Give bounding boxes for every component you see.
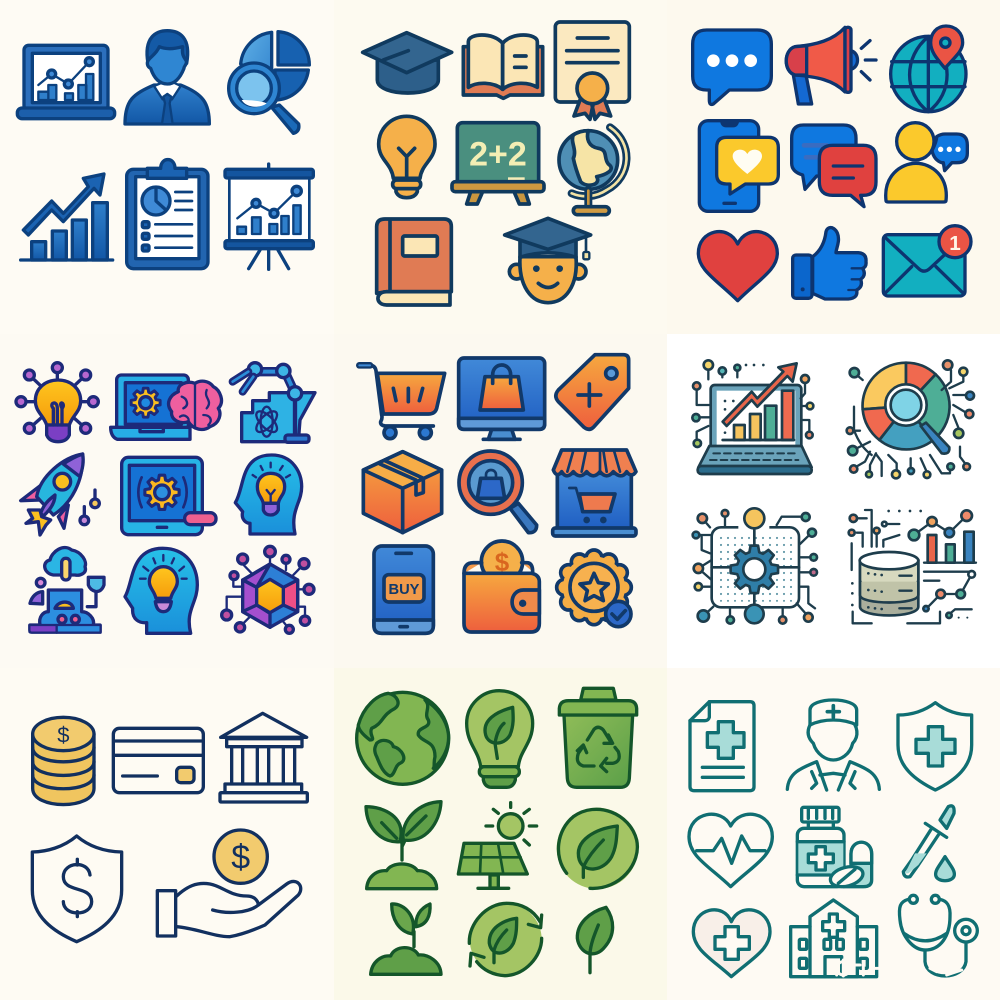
icon: recycle bin (559, 688, 637, 787)
icon: gear circuit board (693, 508, 817, 624)
icon: graduate (505, 218, 591, 303)
icon: hexagon network (222, 546, 314, 633)
panel: finance (32, 713, 307, 942)
icon: donut chart with magnifier (847, 360, 974, 478)
icon: hand with coin (157, 830, 301, 937)
icon: phone with buy button (374, 546, 433, 633)
panel: healthcare (689, 700, 977, 977)
icon: price tag (556, 355, 629, 429)
icon: credit card (113, 728, 203, 793)
icon: rocket (21, 454, 99, 535)
icon: hand with coin: $ (231, 838, 250, 876)
watermark smudge (837, 960, 962, 976)
icon: light bulb (379, 116, 435, 198)
icon: coin stack (33, 717, 94, 805)
icon: head with bulb (235, 455, 302, 534)
icon: head with bulb 2 (125, 548, 197, 633)
icon: stethoscope (899, 895, 977, 976)
icon: laptop with chart (17, 45, 115, 119)
icon: wallet with coin (464, 541, 539, 632)
icon: heart with pulse (689, 814, 772, 887)
icon: thumbs up (793, 228, 866, 299)
icon: open book (463, 35, 543, 98)
icon: shopping cart (359, 365, 445, 439)
icon: diploma (555, 22, 629, 119)
icon: database with charts (849, 510, 976, 623)
panel: innovation and AI (16, 363, 315, 633)
icon: medicine bottle and pills (797, 807, 872, 890)
panel: education (363, 22, 629, 305)
icon: phone with buy button: BUY (389, 582, 420, 598)
icon: small seedling (371, 904, 441, 974)
icon: envelope with badge (883, 226, 971, 296)
icon: single leaf (577, 907, 613, 973)
icon: sprout with two leaves (366, 802, 441, 889)
icon: person with message (886, 123, 967, 202)
panel: e-commerce (359, 355, 636, 633)
icon: eco bulb (467, 691, 533, 787)
icon: laptop with brain (111, 375, 221, 439)
icon: globe with pin (891, 26, 966, 112)
panel: social media (693, 26, 971, 301)
icon: phone with heart bubble (699, 121, 778, 211)
icon: monitor with bag (459, 358, 545, 439)
icon: tablet with gear (122, 457, 216, 535)
panel: environment (357, 688, 638, 976)
icon: bank building (220, 713, 307, 802)
icon: earth (357, 692, 449, 784)
icon: globe (559, 127, 627, 215)
icon: growth chart with arrow (21, 174, 113, 260)
icon: medical document (690, 702, 754, 791)
icon: clipboard report (127, 160, 208, 269)
icon: two chat bubbles (792, 125, 876, 207)
icon: medical shield (898, 703, 972, 790)
icon: quality badge (557, 550, 631, 627)
icon: chat bubble (693, 30, 771, 104)
icon: coin stack: $ (57, 723, 69, 748)
icon: magnifier with bag (459, 451, 537, 533)
icon: envelope with badge: 1 (949, 232, 961, 255)
icon: closed book (377, 219, 451, 305)
icon: hospital (791, 900, 877, 977)
icon: leaf in circle (557, 808, 638, 889)
icon: heart with cross (693, 910, 770, 977)
icon: robotic arm with atom (233, 363, 315, 442)
icon: heart (698, 232, 777, 301)
icon: shield with dollar (32, 836, 122, 942)
icon: wallet with coin: $ (495, 547, 510, 577)
panel: data analytics (692, 360, 976, 624)
icon: graduation cap (363, 33, 452, 93)
icon: doctor (787, 700, 879, 790)
icon: megaphone (786, 27, 876, 104)
icon: cloud machine (29, 548, 104, 633)
icon: networked bulb (16, 363, 98, 442)
icon: cardboard box (363, 452, 442, 533)
icon: pie chart with magnifier (229, 32, 309, 133)
icon: dropper (903, 806, 954, 881)
icon: storefront (553, 450, 636, 536)
icon: presentation board (225, 164, 313, 269)
icon: businessman (125, 31, 209, 124)
icon: laptop with rising chart (692, 360, 813, 474)
icon: chalkboard (452, 123, 544, 204)
panel: business analytics (17, 31, 313, 269)
icon: leaf with recycle arrows (469, 903, 542, 976)
icon: chalkboard: 2+2 (469, 135, 527, 173)
icon: solar panel with sun (458, 803, 537, 888)
